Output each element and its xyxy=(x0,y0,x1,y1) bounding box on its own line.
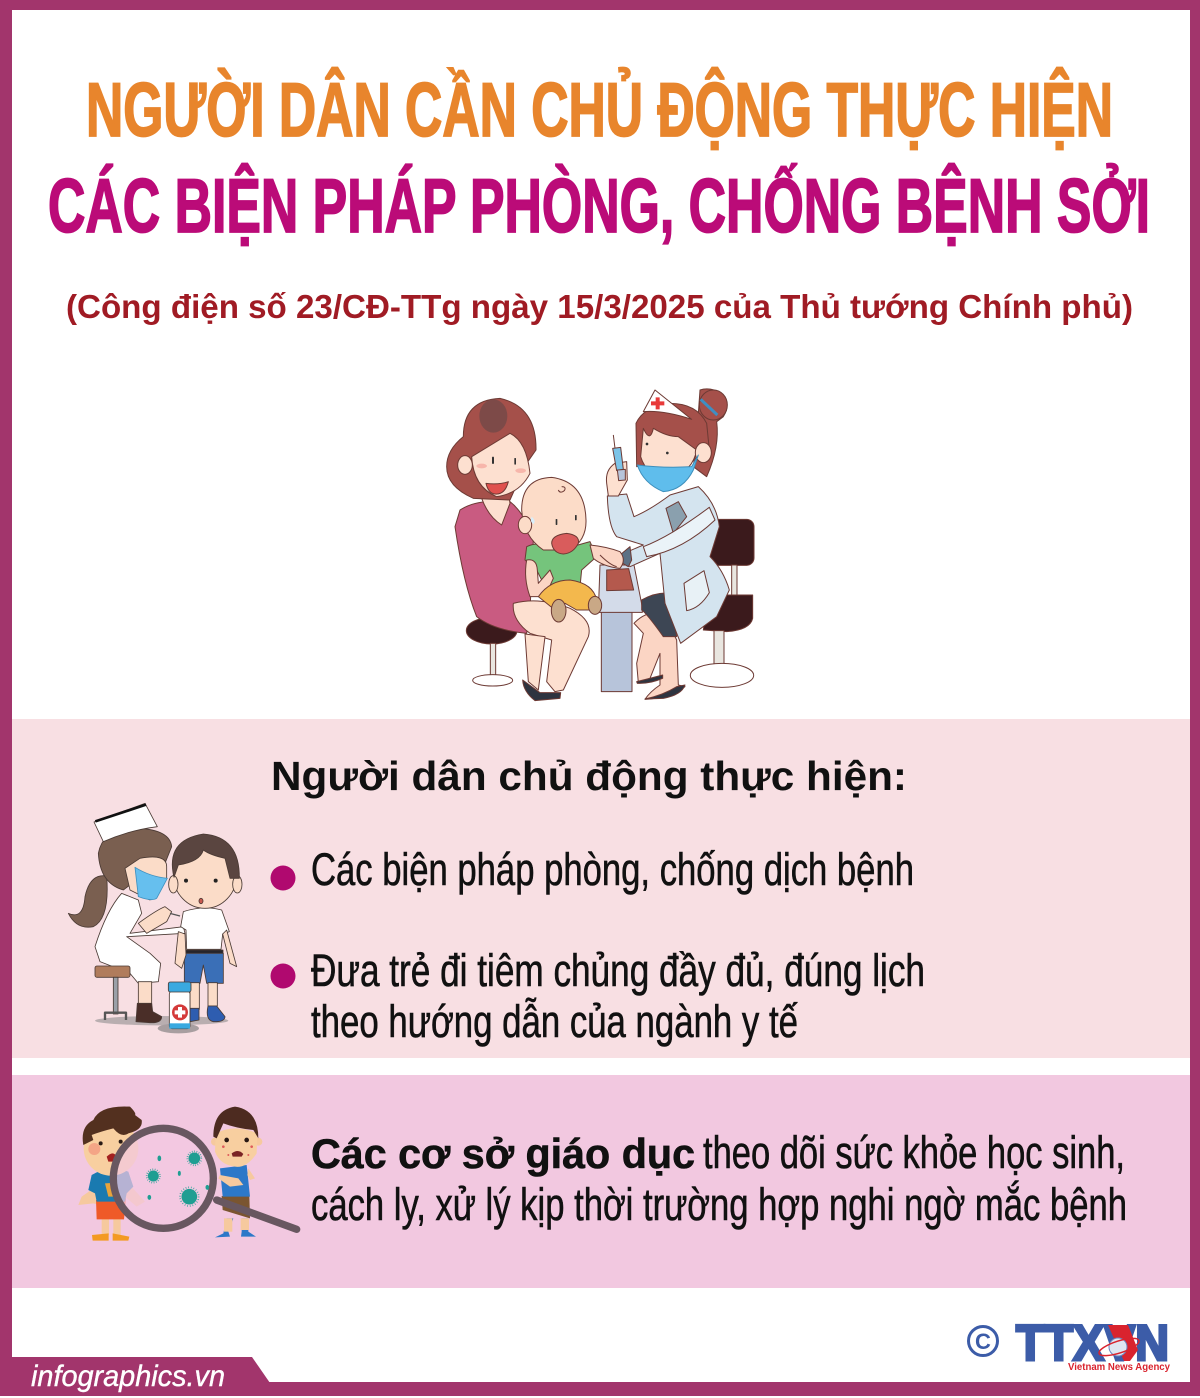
panel: educational institutions xyxy=(12,1075,1190,1288)
icon: left stool xyxy=(466,617,517,686)
icon: right chair xyxy=(690,519,754,687)
illustration: mother, baby and nurse vaccinating xyxy=(447,389,754,701)
panel text: Các cơ sở giáo dục xyxy=(311,1130,695,1177)
left child xyxy=(78,1106,145,1241)
right child xyxy=(211,1107,262,1237)
bullet: full vaccination: theo hướng dẫn của ngành y tế xyxy=(311,996,798,1047)
logo: TTXVN Vietnam News Agency: TTXVN xyxy=(1016,1315,1169,1371)
mother xyxy=(447,398,589,701)
icon: nurse vaccinating schoolboy xyxy=(68,803,242,1033)
footer tab: website: infographics.vn xyxy=(31,1360,225,1393)
bullet: disease prevention: Các biện pháp phòng, chống dịch bệnh xyxy=(311,844,914,895)
viruses xyxy=(147,1151,209,1206)
panel text xyxy=(311,1127,1127,1230)
baby xyxy=(518,477,623,622)
bullet list xyxy=(270,844,925,1047)
footer tab: website xyxy=(0,1357,270,1396)
title xyxy=(48,67,1150,249)
panel heading: Người dân chủ động thực hiện: xyxy=(271,753,907,799)
icon: table xyxy=(598,565,642,692)
bullet: full vaccination: Đưa trẻ đi tiêm chủng đầy đủ, đúng lịch xyxy=(311,945,925,996)
magnifying glass xyxy=(113,1128,297,1229)
panel: residents should act xyxy=(12,719,1190,1058)
subtitle: (Công điện số 23/CĐ-TTg ngày 15/3/2025 của Thủ tướng Chính phủ) xyxy=(66,288,1133,325)
icon: magnifier over sick children xyxy=(78,1106,297,1241)
nurse xyxy=(606,389,729,699)
logo: TTXVN Vietnam News Agency: C xyxy=(975,1329,991,1354)
bullet: full vaccination xyxy=(270,945,925,1047)
logo: TTXVN Vietnam News Agency: Vietnam News Agency xyxy=(1068,1362,1170,1373)
